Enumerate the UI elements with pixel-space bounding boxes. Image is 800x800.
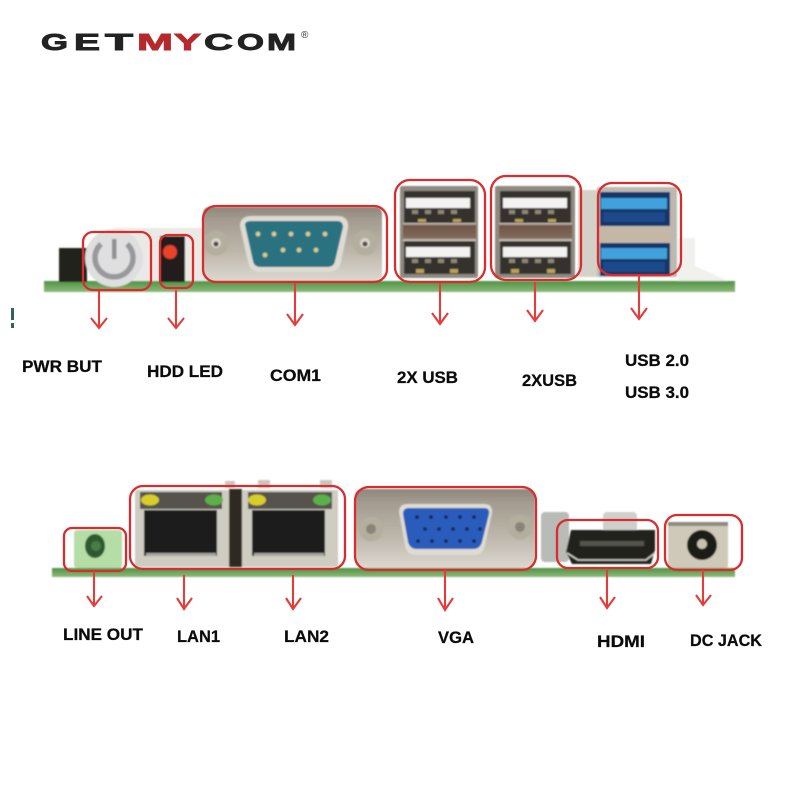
LINE OUT jack [74, 530, 122, 568]
arrow: HDD LED [168, 290, 184, 328]
LAN2 port [242, 490, 338, 567]
callout box: HDMI [557, 520, 658, 568]
callout box: COM1 [203, 206, 387, 282]
logo: Getmycom: O [237, 29, 264, 55]
HDMI connector [566, 530, 655, 564]
arrow: LAN2 [286, 575, 301, 609]
arrow: HDMI [600, 570, 615, 608]
label: LINE OUT: LINE OUT [63, 626, 143, 644]
arrow: USB stack [631, 275, 647, 319]
top PCB strip [44, 281, 735, 292]
top backing shield [115, 190, 735, 284]
arrow: COM1 [287, 283, 303, 325]
label: USB 3.0: USB 3.0 [625, 384, 689, 402]
logo: Getmycom: G [41, 29, 68, 55]
label: LAN1: LAN1 [177, 628, 220, 646]
stray edge mark [11, 308, 14, 328]
label: COM1: COM1 [270, 367, 321, 385]
logo: Getmycom: M [267, 29, 296, 55]
USB 3.0 port stack [597, 187, 677, 277]
VGA connector [355, 489, 535, 568]
logo: Getmycom: ® [301, 30, 309, 41]
panel: top board rear ports [44, 186, 735, 292]
logo: Getmycom: T [105, 29, 134, 55]
callout box: HDD LED [160, 235, 193, 288]
COM1 connector [203, 207, 382, 281]
gap between LAN ports [229, 489, 242, 567]
logo: Getmycom [41, 29, 309, 55]
arrow: PWR BUT [91, 291, 107, 328]
callout box: DC JACK [665, 515, 742, 570]
arrow: LAN1 [177, 575, 192, 609]
arrow: 2XUSB [527, 282, 543, 321]
arrow: VGA [438, 570, 453, 610]
arrow: DC JACK [696, 570, 711, 605]
callout box: PWR BUT [83, 232, 151, 290]
icon: power button [85, 229, 143, 287]
logo: Getmycom: E [74, 29, 100, 55]
callout box: VGA [355, 487, 536, 570]
USB port stack 1 [400, 186, 478, 278]
bottom PCB strip [52, 568, 735, 577]
black switch housing [59, 248, 87, 282]
HDD LED block [160, 236, 185, 282]
logo: Getmycom: M [137, 29, 173, 55]
logo: Getmycom: C [204, 29, 233, 55]
label: PWR BUT: PWR BUT [22, 358, 102, 376]
label: 2XUSB: 2XUSB [522, 372, 577, 390]
arrow: 2X USB [432, 283, 448, 324]
callout box: 2X USB [395, 180, 485, 282]
label: LAN2: LAN2 [284, 628, 329, 646]
callout box: USB 2.0 / 3.0 [598, 183, 681, 275]
USB port stack 2 [495, 186, 575, 278]
label: VGA: VGA [438, 629, 474, 647]
label: DC JACK: DC JACK [690, 632, 762, 650]
callout box: 2XUSB [491, 176, 581, 280]
DC jack [668, 522, 728, 568]
logo: Getmycom: Y [174, 29, 202, 55]
callout box: LINE OUT [64, 528, 126, 571]
capacitors behind ports [225, 480, 637, 562]
label: USB 2.0: USB 2.0 [625, 352, 689, 370]
label: 2X USB: 2X USB [397, 369, 458, 387]
arrow: LINE OUT [87, 571, 102, 606]
panel: bottom board rear ports [52, 480, 735, 577]
callout box: LAN1 and LAN2 [130, 486, 345, 569]
label: HDD LED: HDD LED [147, 363, 223, 381]
label: HDMI: HDMI [597, 633, 645, 651]
LAN1 port [135, 490, 229, 567]
